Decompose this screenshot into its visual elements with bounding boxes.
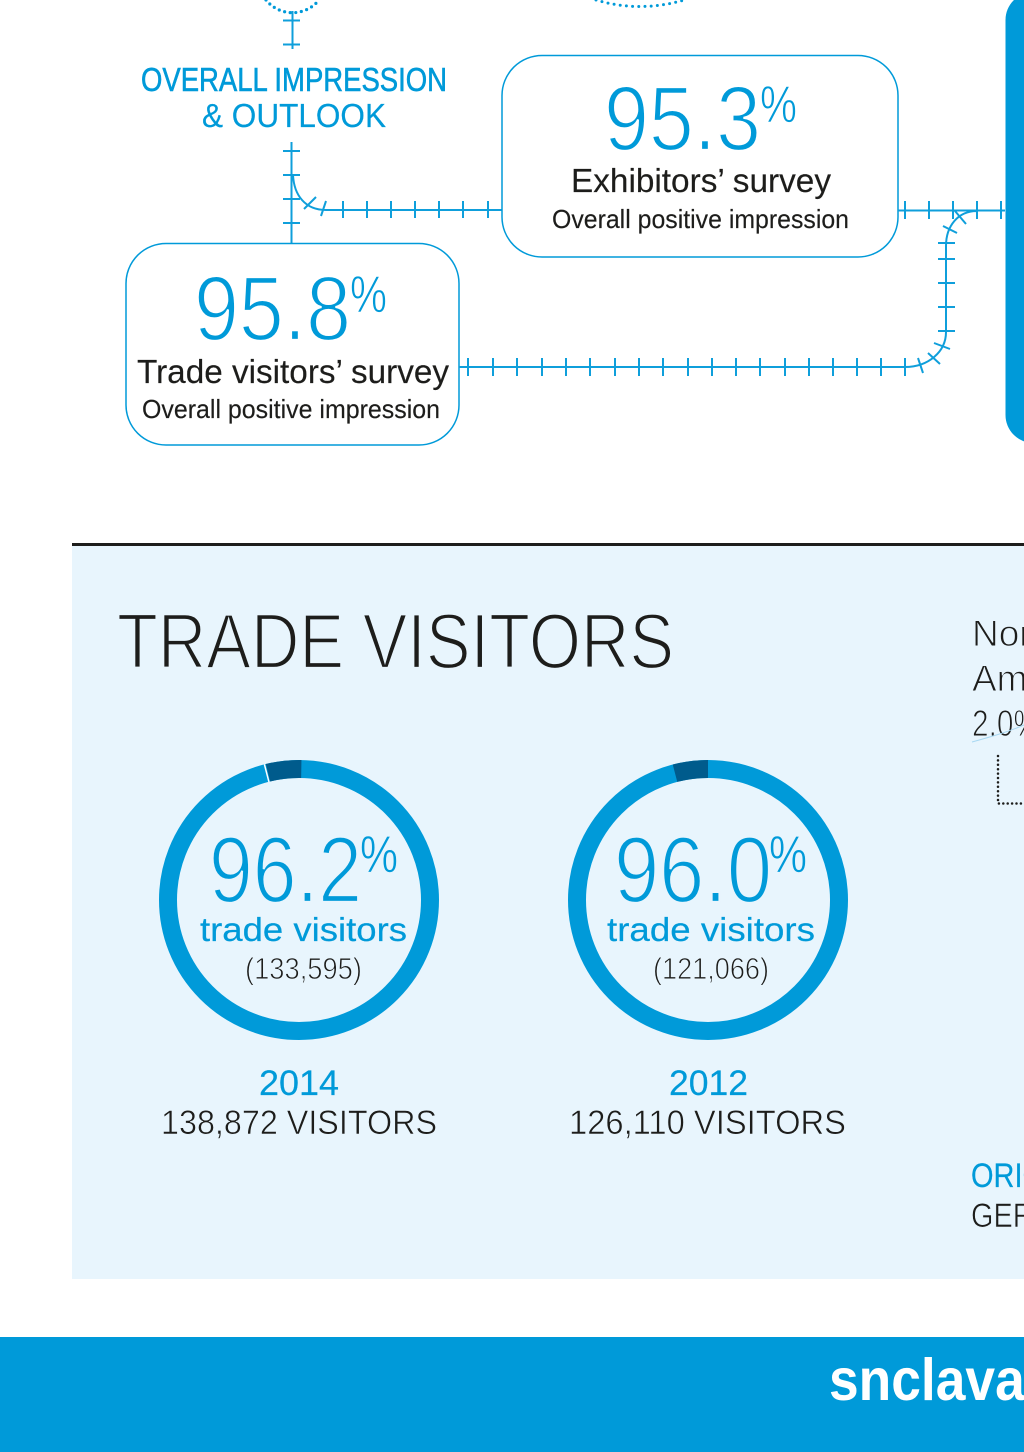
card: exhibitors survey xyxy=(502,56,898,257)
blue side panel xyxy=(1006,0,1024,443)
caption 2012: 2012 xyxy=(669,1064,748,1103)
card: trade visitors survey: % xyxy=(350,266,387,324)
donut chart 2012: trade visitors xyxy=(607,911,815,948)
caption 2014: 2014 xyxy=(259,1064,339,1103)
card: exhibitors survey: Overall positive impression xyxy=(552,204,849,234)
donut chart 2014: 96.2 xyxy=(209,817,362,922)
card: exhibitors survey: Exhibitors’ survey xyxy=(571,162,831,199)
card: trade visitors survey xyxy=(126,244,459,445)
section background xyxy=(72,546,1024,1279)
donut chart 2012: 96.0 xyxy=(614,817,772,922)
card: trade visitors survey: Trade visitors’ survey xyxy=(137,353,450,390)
caption 2012: 126,110 VISITORS xyxy=(569,1104,846,1142)
caption 2012 xyxy=(569,1064,846,1142)
track connector on the right xyxy=(459,201,1005,376)
panel: trade visitors xyxy=(72,543,1024,1279)
donut chart 2012 xyxy=(577,769,839,1031)
card: exhibitors survey: % xyxy=(760,76,797,134)
card: trade visitors survey: 95.8 xyxy=(194,258,351,360)
dotted circle fragment left xyxy=(266,0,319,13)
heading: trade visitors: TRADE VISITORS xyxy=(117,597,674,685)
dotted leader line xyxy=(998,756,1024,804)
card: trade visitors survey: Overall positive impression xyxy=(142,394,440,424)
donut chart 2012: % xyxy=(769,826,807,884)
track connector between heading, trade visitors box and exhibitors box xyxy=(283,142,502,243)
map label: North America xyxy=(972,613,1024,744)
heading: overall impression and outlook: & OUTLOOK xyxy=(202,97,386,134)
caption 2014: 138,872 VISITORS xyxy=(161,1104,437,1142)
heading: overall impression and outlook xyxy=(141,61,447,134)
heading: overall impression and outlook: OVERALL IMPRESSION xyxy=(141,61,447,98)
card: exhibitors survey: 95.3 xyxy=(604,68,761,170)
donut chart 2012: (121,066) xyxy=(653,951,769,986)
caption 2014 xyxy=(161,1064,437,1142)
panel: overall impression flow xyxy=(126,0,1024,445)
donut chart 2014: (133,595) xyxy=(245,951,362,986)
track connector from top xyxy=(283,11,300,49)
section top rule xyxy=(72,543,1024,546)
donut chart 2014: % xyxy=(360,826,398,884)
donut chart 2014: trade visitors xyxy=(200,911,407,948)
origin label xyxy=(971,1157,1024,1235)
footer band xyxy=(0,1337,1024,1452)
dotted circle fragment centre xyxy=(596,0,684,7)
donut chart 2014 xyxy=(168,764,430,1031)
